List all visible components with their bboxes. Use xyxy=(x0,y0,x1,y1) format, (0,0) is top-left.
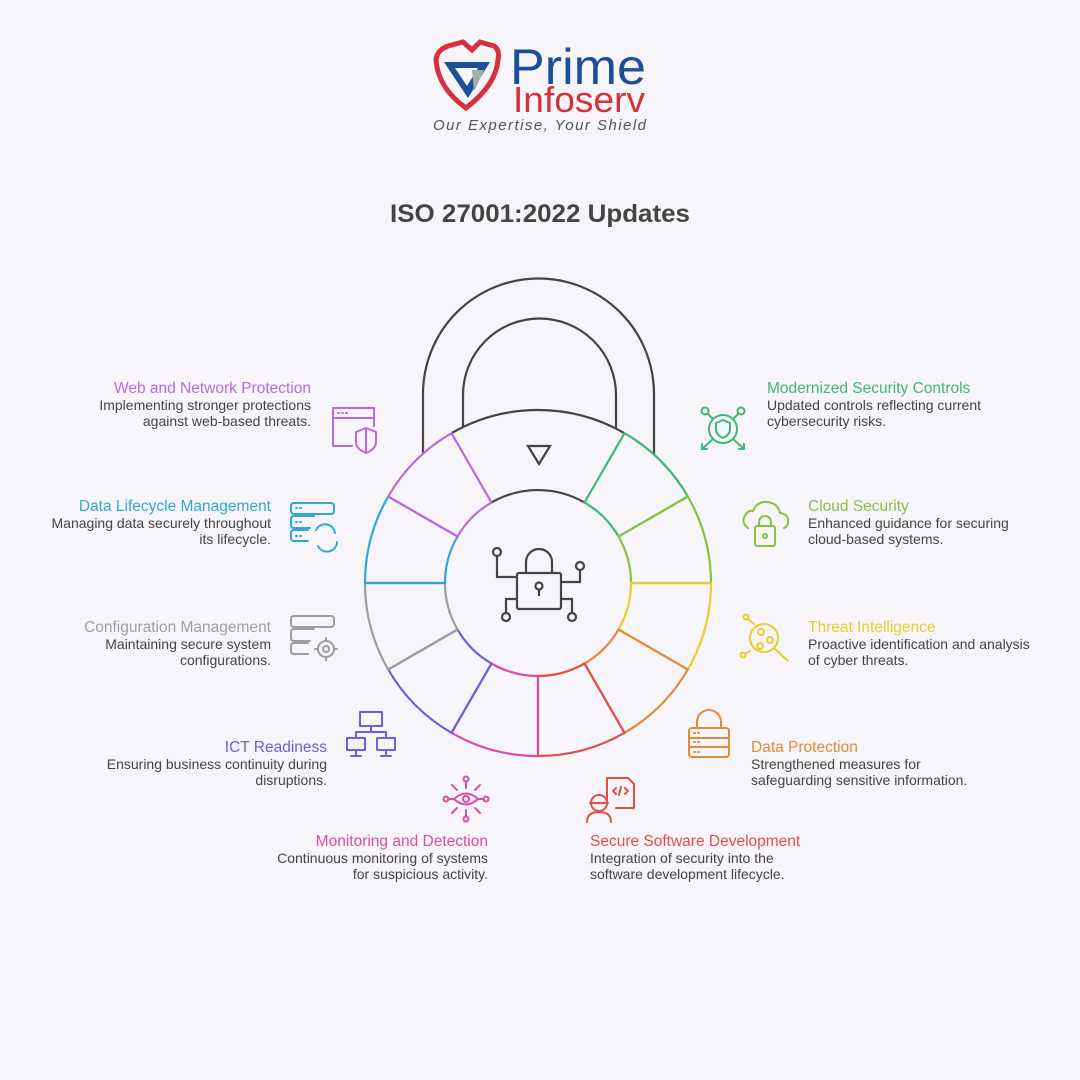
title: ISO 27001:2022 Updates xyxy=(390,200,690,228)
segment: data lifecycle (blue) xyxy=(365,496,458,583)
icon: magnifier network xyxy=(740,614,788,661)
item: ICT Readiness: Ensuring business continuity during xyxy=(107,756,327,772)
item: Cloud Security: Cloud Security xyxy=(808,498,909,515)
item: Cloud Security: Enhanced guidance for securing xyxy=(808,515,1009,531)
logo: Infoserv xyxy=(513,79,645,120)
item: Configuration Management: Configuration Management xyxy=(84,619,272,636)
item: Data Protection: safeguarding sensitive information. xyxy=(751,772,967,788)
logo xyxy=(433,39,647,134)
segment: secure software (red) xyxy=(538,664,624,756)
item: Secure Software Development: Integration of security into the xyxy=(590,850,774,866)
item: Cloud Security: cloud-based systems. xyxy=(808,531,943,547)
icon: central circuit lock xyxy=(493,548,584,621)
item: Configuration Management xyxy=(84,616,337,668)
item: Data Protection xyxy=(689,710,967,788)
item: Configuration Management: Maintaining secure system xyxy=(105,636,271,652)
icon: server lock xyxy=(689,710,729,757)
item: Web and Network Protection: Implementing stronger protections xyxy=(99,397,311,413)
item: Threat Intelligence xyxy=(740,614,1030,668)
segment: monitoring (pink) xyxy=(452,664,538,756)
item: Configuration Management: configurations. xyxy=(180,652,271,668)
segment: threat (yellow) xyxy=(618,583,711,670)
icon: shield controls xyxy=(702,408,744,449)
item: Modernized Security Controls: Modernized Security Controls xyxy=(767,380,971,397)
icon: cloud lock xyxy=(743,502,788,546)
icon: network computers xyxy=(347,712,395,756)
icon: developer code xyxy=(587,778,634,822)
top segment with keyhole triangle xyxy=(452,410,624,502)
item: Monitoring and Detection: for suspicious activity. xyxy=(353,866,488,882)
item: Secure Software Development xyxy=(587,778,801,882)
item: Secure Software Development: Secure Software Development xyxy=(590,833,801,850)
item: Monitoring and Detection xyxy=(277,776,488,882)
item: Modernized Security Controls: cybersecurity risks. xyxy=(767,413,886,429)
segment: web (purple) xyxy=(388,433,492,536)
item: Data Lifecycle Management xyxy=(52,498,337,552)
item: ICT Readiness xyxy=(107,712,395,788)
item: Data Protection: Data Protection xyxy=(751,739,858,756)
item: Data Protection: Strengthened measures for xyxy=(751,756,921,772)
segment: ICT (violet) xyxy=(388,630,492,733)
item: Data Lifecycle Management: Managing data securely throughout xyxy=(52,515,271,531)
segment: cloud (lime) xyxy=(618,496,711,583)
item: Threat Intelligence: Threat Intelligence xyxy=(808,619,936,636)
item: Web and Network Protection: against web-based threats. xyxy=(143,413,311,429)
shackle xyxy=(423,278,654,454)
padlock diagram xyxy=(365,278,711,756)
logo: Prime xyxy=(510,39,646,95)
icon: eye network xyxy=(444,776,488,822)
icon: browser shield xyxy=(333,408,376,453)
item: Web and Network Protection xyxy=(99,380,376,453)
item: Modernized Security Controls: Updated controls reflecting current xyxy=(767,397,981,413)
icon: server gear xyxy=(291,616,337,660)
item: Threat Intelligence: Proactive identification and analysis xyxy=(808,636,1030,652)
item: Cloud Security xyxy=(743,498,1009,547)
item: Modernized Security Controls xyxy=(702,380,981,449)
logo: Our Expertise, Your Shield xyxy=(433,117,647,134)
item: Threat Intelligence: of cyber threats. xyxy=(808,652,908,668)
segment: data protection (orange) xyxy=(584,630,688,733)
item: Data Lifecycle Management: its lifecycle. xyxy=(199,531,271,547)
item: Secure Software Development: software development lifecycle. xyxy=(590,866,785,882)
item: Data Lifecycle Management: Data Lifecycle Management xyxy=(79,498,272,515)
item: Monitoring and Detection: Continuous monitoring of systems xyxy=(277,850,488,866)
item: ICT Readiness: ICT Readiness xyxy=(225,739,327,756)
segment: modernized (green) xyxy=(584,433,688,536)
icon: shield logo xyxy=(436,42,498,108)
item: ICT Readiness: disruptions. xyxy=(255,772,327,788)
segment: configuration (grey) xyxy=(365,583,458,670)
item: Monitoring and Detection: Monitoring and Detection xyxy=(316,833,488,850)
icon: server sync xyxy=(291,503,337,552)
item: Web and Network Protection: Web and Network Protection xyxy=(114,380,311,397)
